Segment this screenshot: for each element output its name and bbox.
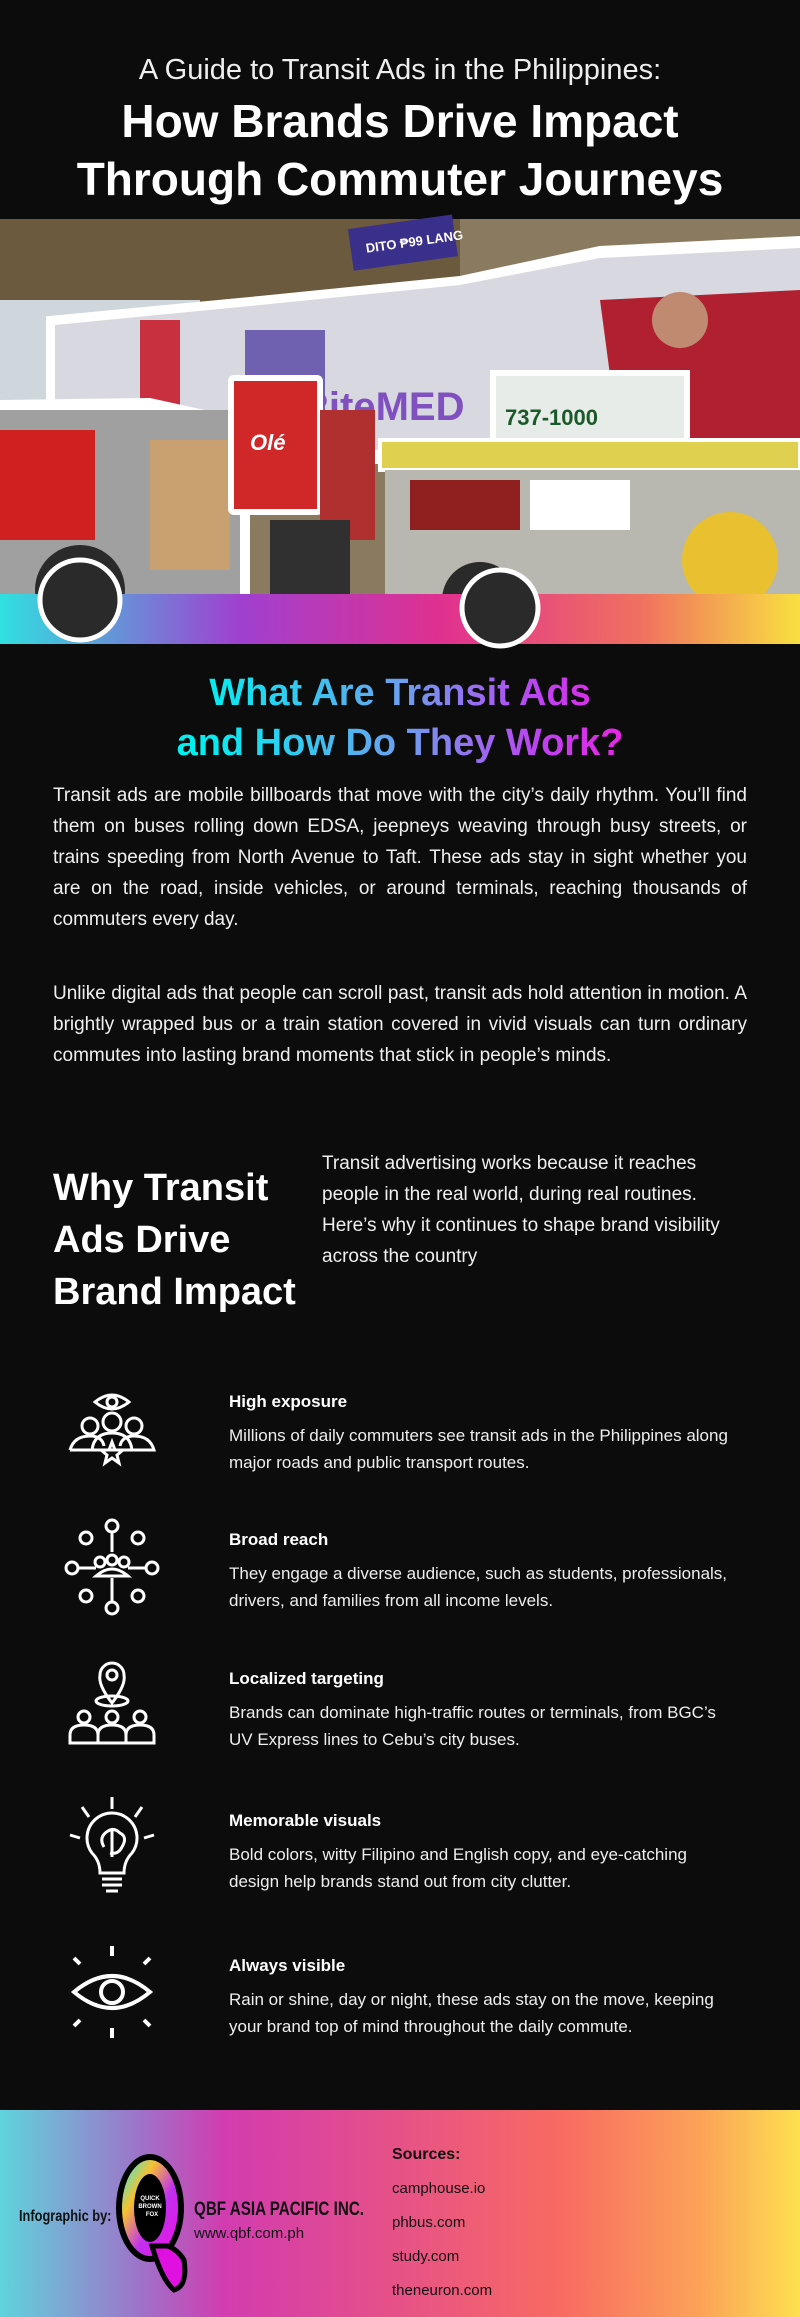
item: always visible xyxy=(71,1946,714,2038)
item: high exposure xyxy=(68,1392,728,1472)
item: memorable visuals xyxy=(70,1797,687,1892)
credit label: Infographic by: xyxy=(19,2208,111,2225)
sources: study.com xyxy=(392,2248,459,2265)
icon: people with eye xyxy=(68,1394,156,1466)
icon: network xyxy=(64,1518,160,1616)
paragraph 2: Unlike digital ads that people can scroll past, transit ads hold attention in motion. A brightly wrapped bus or a train station covered in vivid visuals can turn ordinary commutes into lasting brand moments that stick in people’s minds. xyxy=(53,983,747,1066)
item: always visible: Always visible xyxy=(229,1956,345,1975)
heading: what are transit ads: What Are Transit Ads xyxy=(209,672,591,714)
sources: phbus.com xyxy=(392,2214,465,2231)
heading: why transit ads: Brand Impact xyxy=(53,1271,296,1313)
logo Q: BROWN xyxy=(138,2204,162,2210)
sources: camphouse.io xyxy=(392,2180,485,2197)
footer xyxy=(0,2110,800,2317)
item: memorable visuals: Bold colors, witty Filipino and English copy, and eye-catching design help brands stand out from city clutter. xyxy=(229,1845,687,1891)
item: localized targeting: Localized targeting xyxy=(229,1669,384,1688)
heading: what are transit ads xyxy=(0,668,800,768)
hero photo collage: DITO ₱99 LANG xyxy=(365,227,464,256)
subtitle: A Guide to Transit Ads in the Philippines: xyxy=(139,54,661,86)
paragraph 1: Transit ads are mobile billboards that move with the city’s daily rhythm. You’ll find them on buses rolling down EDSA, jeepneys weaving through busy streets, or trains speeding from North Avenue to Taft. These ads stay in sight whether you are on the road, inside vehicles, or around terminals, reaching thousands of commuters every day. xyxy=(53,785,747,930)
logo Q xyxy=(116,2154,188,2293)
hero photo collage: Olé xyxy=(250,430,285,455)
intro text: Transit advertising works because it reaches people in the real world, during real routines. Here’s why it continues to shape brand visibility across the country xyxy=(322,1153,720,1267)
heading: what are transit ads: and How Do They Work? xyxy=(177,722,623,764)
item: memorable visuals: Memorable visuals xyxy=(229,1811,381,1830)
icon: lightbulb brain xyxy=(70,1797,154,1892)
website: www.qbf.com.ph xyxy=(194,2225,304,2242)
hero photo collage: RiteMED xyxy=(300,385,464,429)
logo Q: FOX xyxy=(146,2212,158,2218)
item: broad reach: They engage a diverse audience, such as students, professionals, drivers, and families from all income levels. xyxy=(229,1564,727,1610)
logo Q: QUICK xyxy=(140,2196,160,2202)
hero photo collage xyxy=(0,214,800,648)
title: How Brands Drive Impact xyxy=(121,95,679,147)
icon: location pin with people xyxy=(68,1662,156,1744)
item: always visible: Rain or shine, day or night, these ads stay on the move, keeping your brand top of mind throughout the daily commute. xyxy=(229,1990,714,2036)
hero photo collage: 737-1000 xyxy=(505,405,598,430)
sources: theneuron.com xyxy=(392,2282,492,2299)
item: broad reach: Broad reach xyxy=(229,1530,328,1549)
icon: eye xyxy=(71,1946,153,2038)
sources: Sources: xyxy=(392,2146,460,2163)
title xyxy=(77,95,723,205)
heading: why transit ads xyxy=(53,1167,296,1313)
item: high exposure: Millions of daily commuters see transit ads in the Philippines along major roads and public transport routes. xyxy=(229,1426,728,1472)
title: Through Commuter Journeys xyxy=(77,153,723,205)
company name: QBF ASIA PACIFIC INC. xyxy=(194,2199,364,2220)
heading: why transit ads: Why Transit xyxy=(53,1167,268,1209)
item: localized targeting xyxy=(68,1662,716,1749)
sources xyxy=(392,2146,492,2299)
heading: why transit ads: Ads Drive xyxy=(53,1219,230,1261)
item: broad reach xyxy=(64,1518,727,1616)
item: high exposure: High exposure xyxy=(229,1392,347,1411)
item: localized targeting: Brands can dominate high-traffic routes or terminals, from BGC’s UV Express lines to Cebu’s city buses. xyxy=(229,1703,716,1749)
